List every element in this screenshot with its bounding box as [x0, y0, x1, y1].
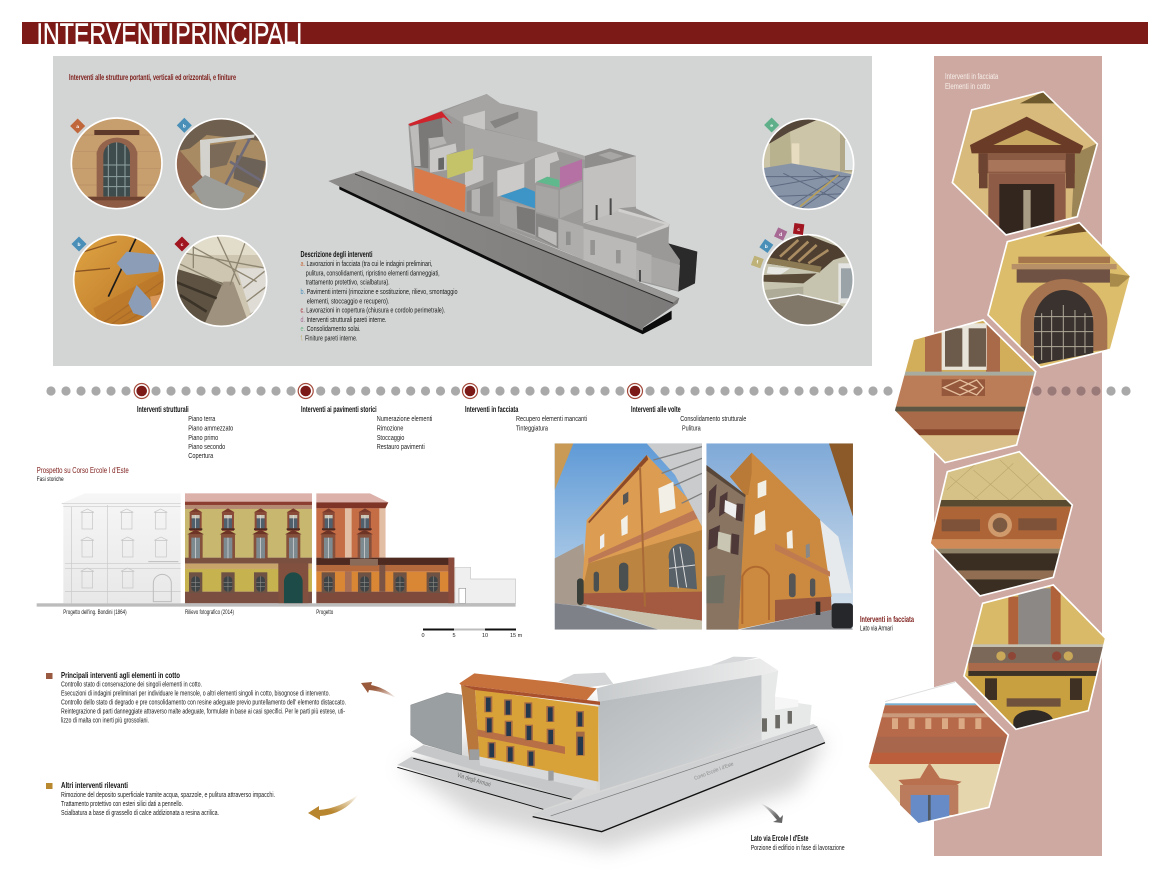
timeline: pavimenti storici: [301, 405, 433, 451]
elevation captions: [63, 609, 334, 616]
photo circle: window: [70, 117, 163, 211]
photo: corner view two: [706, 443, 853, 630]
badge c: [174, 236, 190, 252]
ground shadow: [400, 700, 827, 850]
scale bar: [422, 628, 523, 639]
arrow: to cotto text: [361, 682, 396, 698]
arrow: to altri interventi text: [308, 795, 358, 820]
badge f: f: [756, 260, 758, 266]
badge c: c: [797, 227, 800, 233]
elevation captions: Progetto: [316, 609, 334, 616]
badge b: [759, 239, 773, 253]
marker: [46, 673, 52, 679]
timeline: interventi strutturali: Piano primo: [188, 433, 218, 442]
timeline dots: [46, 384, 1131, 398]
hexagon: balcony: [962, 583, 1108, 732]
coloured intervention areas: [408, 111, 582, 212]
historic drawing: [62, 493, 181, 603]
side panel heading: Interventi in facciata: [945, 72, 999, 81]
timeline: interventi strutturali: [137, 405, 233, 460]
timeline: volte: Consolidamento strutturale: [680, 414, 746, 423]
timeline: interventi strutturali: Interventi strutturali: [137, 405, 189, 414]
description text: c. Lavorazioni in copertura (chiusura e cordolo perimetrale).: [300, 306, 445, 315]
hexagon: balustrade: [893, 320, 1037, 464]
timeline: pavimenti storici: Rimozione: [377, 424, 403, 432]
text: altri interventi: Scialbatura a base di grassello di calce addizionata a resina acrilica.: [61, 808, 219, 817]
description text: d. Interventi strutturali pareti interne.: [300, 315, 386, 324]
exterior caption: [751, 834, 845, 852]
road corso Ercole: [533, 724, 825, 832]
elevation captions: Progetto dell'ing. Bondini (1864): [63, 609, 127, 616]
text: principali interventi cotto: [46, 671, 346, 724]
3D building exterior: [397, 657, 827, 850]
road: [328, 171, 679, 334]
scale bar: 15 m: [510, 633, 523, 639]
exterior caption: Lato via Ercole I d'Este: [751, 834, 809, 843]
elevation heading: [37, 465, 129, 483]
hexagon: pediment window: [950, 90, 1100, 237]
photo circle: brush restoration: [73, 233, 167, 327]
badge e: e: [770, 123, 773, 129]
scale bar: 5: [452, 633, 456, 639]
photo circle: floor slab: [762, 118, 855, 212]
project rendering: [316, 493, 454, 603]
side panel background: [934, 56, 1102, 856]
timeline: facciata: [465, 405, 587, 432]
marker: [46, 783, 52, 789]
panel heading: Interventi alle strutture portanti, verticali ed orizzontali, e finiture: [69, 73, 236, 82]
elevation heading: Fasi storiche: [37, 476, 64, 483]
text: principali interventi cotto: Reintegrazione di parti danneggiate attraverso malte adeguate, formulate in base ai casi specifici. Per le parti più estese, uti-: [61, 706, 345, 716]
scale bar: 10: [482, 633, 488, 639]
badge d: [774, 227, 787, 241]
description text: a. Lavorazioni in facciata (tra cui le indagini preliminari,: [300, 259, 432, 268]
description text: [300, 250, 458, 343]
description text: Descrizione degli interventi: [300, 250, 372, 259]
arrow: to lato via Ercole caption: [760, 803, 783, 823]
elevation heading: Prospetto su Corso Ercole I d'Este: [37, 465, 129, 475]
photo circle: roof scaffolding: [175, 235, 268, 328]
text: principali interventi cotto: Principali interventi agli elementi in cotto: [61, 671, 180, 680]
side panel hexagon photos: [863, 90, 1133, 827]
street photos caption: [860, 614, 914, 632]
survey photo: [185, 493, 312, 603]
badge e: [764, 117, 779, 133]
text: altri interventi: Altri interventi rilevanti: [61, 781, 128, 790]
scale bar: 0: [422, 633, 425, 639]
photo: corner view one: [555, 443, 702, 630]
timeline: pavimenti storici: Stoccaggio: [377, 433, 404, 442]
description text: elementi, stoccaggio e recupero).: [307, 296, 389, 305]
side panel background: Elementi in cotto: [945, 82, 991, 91]
timeline: facciata: Tinteggiatura: [516, 424, 549, 432]
text: principali interventi cotto: Controllo stato di conservazione dei singoli elementi in cotto.: [61, 680, 202, 688]
title: INTERVENTI PRINCIPALI: [36, 18, 302, 51]
badge a: [70, 118, 85, 134]
badge c: c: [181, 242, 184, 248]
badge c: [793, 223, 804, 235]
side courtyard block: [411, 693, 462, 755]
badge b: b: [183, 123, 186, 129]
badge b: b: [77, 242, 81, 248]
timeline: facciata: Interventi in facciata: [465, 405, 519, 414]
text: principali interventi cotto: Controllo dello stato di degrado e pre consolidamento con resine adeguate previo puntellamento dell' elemento distaccato.: [61, 698, 346, 706]
description text: f. Finiture pareti interne.: [300, 334, 358, 343]
text: altri interventi: Rimozione del deposito superficiale tramite acqua, spazzole, e pulitura attraverso impacchi.: [61, 790, 275, 799]
street photos caption: Lato via Armari: [860, 626, 893, 632]
elevation drawings: [37, 493, 516, 607]
description text: trattamento protettivo, scialbatura).: [306, 278, 390, 287]
3D sectioned building model: [328, 94, 697, 334]
ground line: [37, 603, 516, 607]
road label: Via degli Armari: [456, 772, 492, 789]
road via Armari: [397, 745, 587, 809]
timeline: interventi strutturali: Piano secondo: [188, 442, 225, 451]
title bar: [22, 18, 1148, 51]
street photos caption: Interventi in facciata: [860, 614, 914, 624]
street photos: [555, 443, 853, 630]
text: principali interventi cotto: Esecuzioni di indagini preliminari per individuare le mensole, o altri elementi singoli in cotto, bisognose di intervento.: [61, 688, 330, 698]
exterior caption: Porzione di edificio in fase di lavorazione: [751, 843, 845, 852]
grey wall block: [558, 657, 812, 791]
text: principali interventi cotto: lizzo di malta con inerti più grossolani.: [61, 716, 149, 724]
badge b: [177, 118, 192, 133]
photo circle: floor survey: [175, 118, 268, 212]
badge f: [751, 256, 764, 268]
description text: b. Pavimenti interni (rimozione e sostituzione, rilievo, smontaggio: [300, 287, 458, 296]
timeline: volte: Interventi alle volte: [631, 405, 681, 414]
description text: e. Consolidamento solai.: [300, 324, 360, 333]
text: altri interventi: Trattamento protettivo con esteri silici dati a pennello.: [61, 799, 183, 808]
timeline: pavimenti storici: Restauro pavimenti: [377, 442, 425, 451]
photo circle: attic room: [762, 233, 855, 327]
badge b: [71, 236, 87, 252]
timeline: volte: [631, 405, 746, 432]
road label: Corso Ercole I d'Este: [694, 761, 735, 782]
painted facade: [459, 673, 600, 791]
hexagon: brick frieze: [863, 680, 1012, 827]
text: altri interventi: [46, 781, 275, 817]
panel: interventions with 3D model: [53, 56, 872, 366]
left photo circles: [70, 117, 268, 328]
timeline: facciata: Recupero elementi mancanti: [516, 414, 587, 423]
description text: pulitura, consolidamenti, ripristino elementi danneggiati,: [306, 268, 440, 277]
timeline: interventi strutturali: Piano ammezzato: [188, 424, 233, 432]
right photo circles: [751, 117, 855, 327]
hexagon: arched window: [987, 222, 1133, 368]
timeline: interventi strutturali: Copertura: [188, 451, 214, 460]
timeline: pavimenti storici: Interventi ai pavimenti storici: [301, 405, 377, 414]
badge d: d: [779, 232, 782, 238]
hexagon: medallion: [928, 450, 1075, 598]
timeline: pavimenti storici: Numerazione elementi: [377, 414, 433, 423]
badge a: a: [76, 124, 79, 130]
building volume: [408, 94, 697, 292]
timeline: interventi strutturali: Piano terra: [188, 414, 216, 423]
badge b: b: [765, 244, 768, 250]
elevation captions: Rilievo fotografico (2014): [185, 609, 234, 616]
neighbouring outline: [455, 567, 516, 603]
timeline: volte: Pulitura: [682, 424, 701, 432]
